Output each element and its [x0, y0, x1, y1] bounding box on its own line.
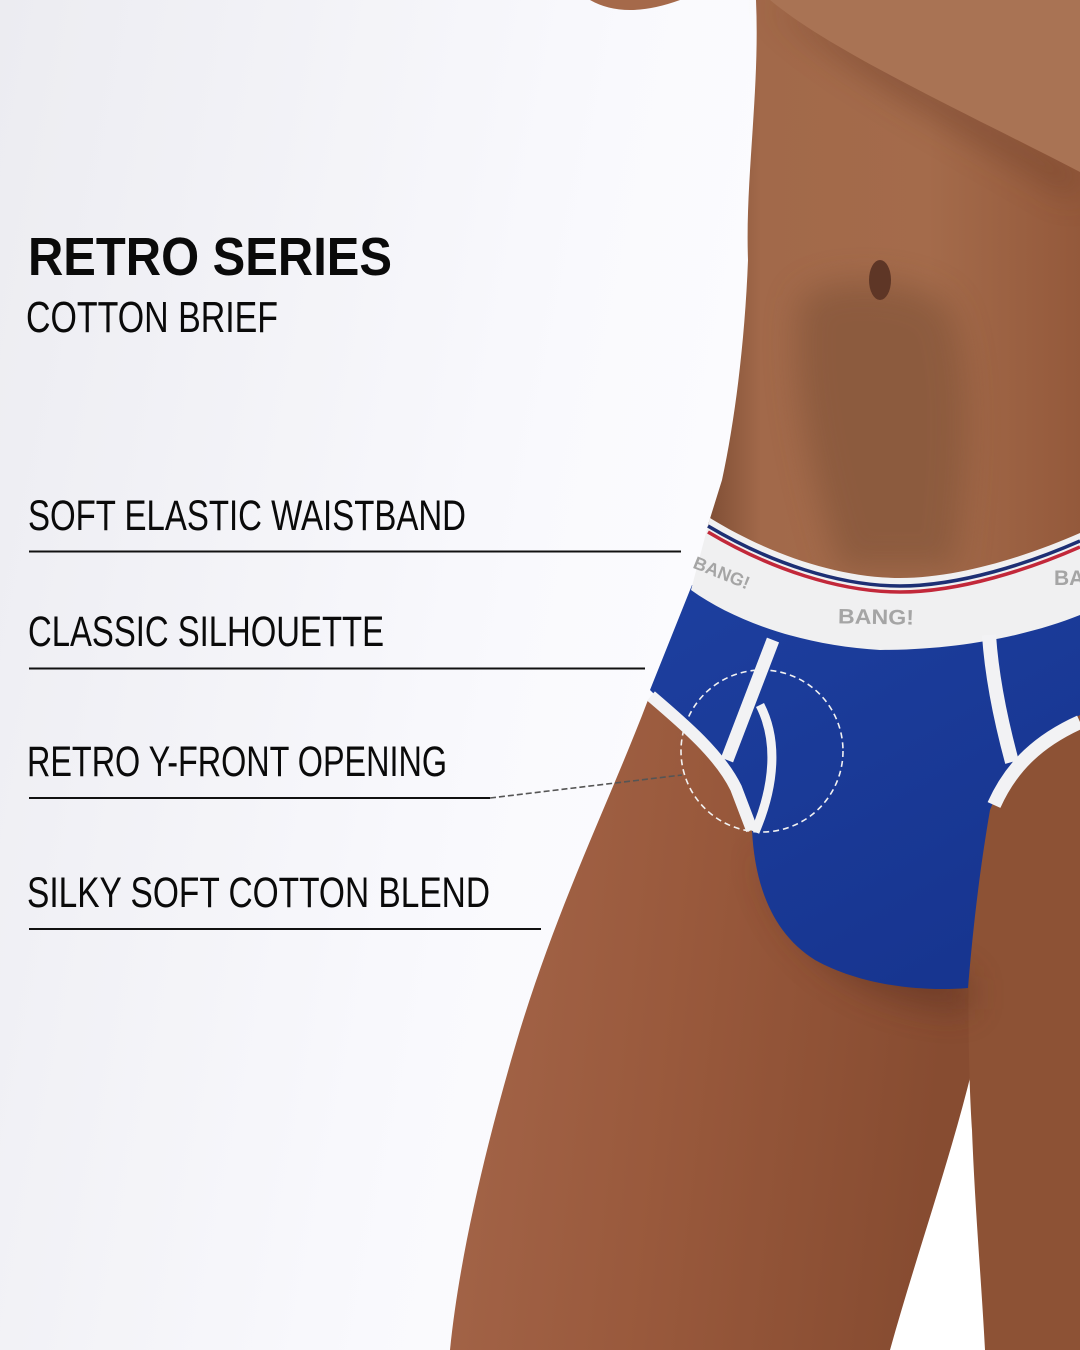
feature: y-front with callout leader: [27, 738, 682, 798]
feature: silhouette: CLASSIC SILHOUETTE: [28, 608, 384, 656]
waistband logo centre: BANG!: [838, 605, 914, 630]
model photo illustration: [450, 0, 1080, 1350]
white piping right: [989, 635, 1012, 762]
shadow under brief: [760, 850, 970, 1010]
feature: cotton blend: SILKY SOFT COTTON BLEND: [27, 869, 490, 917]
brief body: [650, 585, 1080, 989]
title: RETRO SERIES: [28, 227, 392, 287]
waistband stripes: [708, 526, 1080, 586]
left leg: [450, 700, 972, 1350]
white leg piping left: [651, 696, 752, 830]
arm shadow: [770, 0, 1080, 195]
navel: [869, 260, 891, 300]
right leg: [968, 700, 1080, 1350]
feature: waistband: SOFT ELASTIC WAISTBAND: [28, 492, 466, 540]
callout circle: [681, 670, 843, 832]
hand at top edge: [590, 0, 680, 10]
arm across top right: [770, 0, 1080, 172]
feature: y-front with callout leader: RETRO Y-FRONT OPENING: [27, 738, 447, 786]
torso: [700, 0, 1080, 640]
Y-front piping: [727, 640, 773, 760]
waistband logo left: BANG!: [691, 553, 753, 593]
abdomen hair and shading: [797, 282, 966, 570]
waistband: [691, 518, 1080, 650]
subtitle: COTTON BRIEF: [26, 293, 278, 342]
